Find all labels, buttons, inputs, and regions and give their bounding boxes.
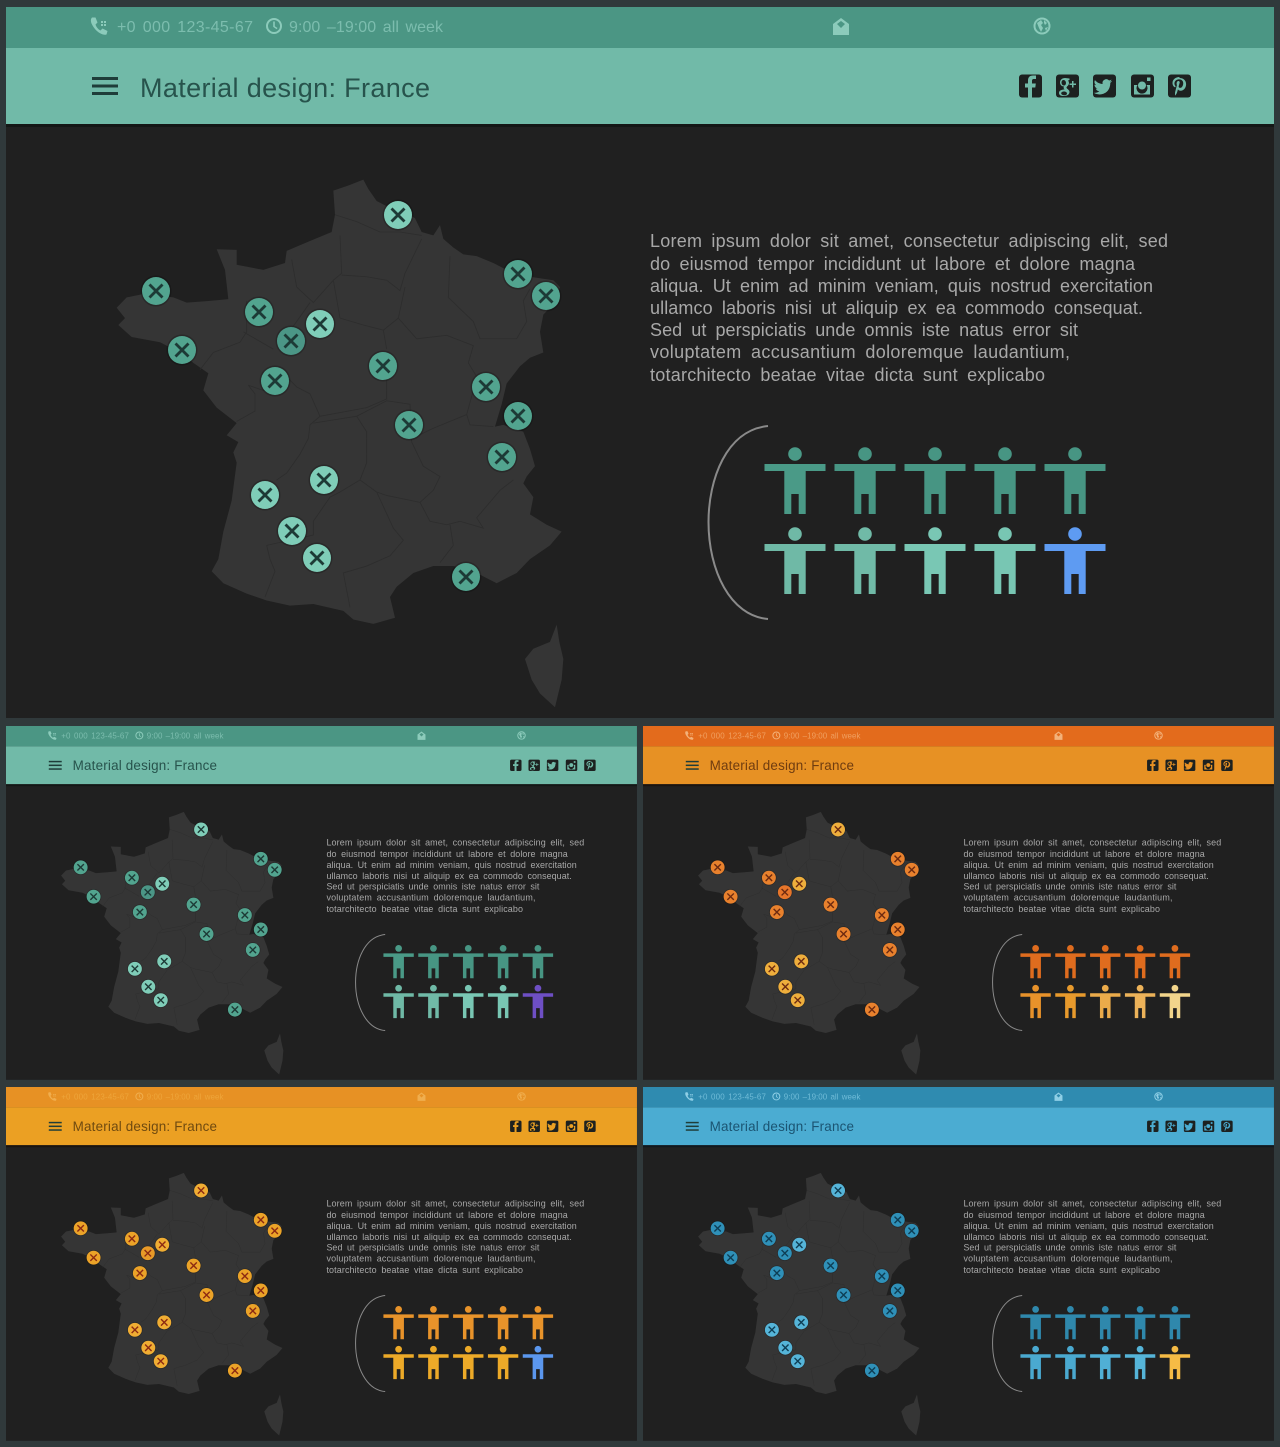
bracket arc bbox=[356, 1295, 385, 1392]
body text: Lorem ipsum dolor sit amet, consectetur adipiscing elit, sed bbox=[963, 1198, 1221, 1208]
map of France with pins bbox=[61, 1173, 283, 1435]
body text: ullamco laboris nisi ut aliquip ex ea commodo consequat. bbox=[326, 1232, 572, 1242]
header bar: Material design: France bbox=[73, 1119, 217, 1134]
header bar: Material design: France bbox=[73, 758, 217, 773]
body text: ullamco laboris nisi ut aliquip ex ea commodo consequat. bbox=[650, 298, 1143, 318]
body text: Lorem ipsum dolor sit amet, consectetur adipiscing elit, sed bbox=[326, 1198, 584, 1208]
top contact bar: +0 000 123-45-67 bbox=[698, 731, 766, 740]
body text: voluptatem accusantium doloremque laudantium, bbox=[650, 342, 1070, 362]
body text: ullamco laboris nisi ut aliquip ex ea commodo consequat. bbox=[963, 871, 1209, 881]
map of France with pins bbox=[61, 812, 283, 1074]
top contact bar bbox=[643, 726, 1274, 746]
header bar bbox=[6, 48, 1274, 127]
body text: aliqua. Ut enim ad minim veniam, quis nostrud exercitation bbox=[963, 860, 1214, 870]
map of France with pins bbox=[698, 1173, 920, 1435]
bracket arc bbox=[356, 934, 385, 1031]
panel: large teal slide bbox=[6, 7, 1274, 718]
pictogram chart: ten people bbox=[383, 945, 553, 1018]
header bar bbox=[643, 1107, 1274, 1147]
map of France with pins bbox=[698, 812, 920, 1074]
top contact bar: 9:00 –19:00 all week bbox=[147, 731, 223, 740]
body text: totarchitecto beatae vitae dicta sunt explicabo bbox=[326, 1265, 523, 1275]
pictogram chart: ten people bbox=[383, 1306, 553, 1379]
body text: voluptatem accusantium doloremque laudantium, bbox=[326, 893, 535, 903]
top contact bar: 9:00 –19:00 all week bbox=[289, 19, 444, 36]
body text: totarchitecto beatae vitae dicta sunt explicabo bbox=[963, 1265, 1160, 1275]
top contact bar: +0 000 123-45-67 bbox=[698, 1092, 766, 1101]
bracket arc bbox=[708, 426, 768, 619]
body text: do eiusmod tempor incididunt ut labore et dolore magna bbox=[963, 1210, 1205, 1220]
body text: voluptatem accusantium doloremque laudantium, bbox=[963, 1254, 1172, 1264]
slide background bbox=[6, 7, 1274, 718]
body text: Sed ut perspiciatis unde omnis iste natus error sit bbox=[963, 1243, 1177, 1253]
slide background bbox=[643, 1087, 1274, 1441]
top contact bar: 9:00 –19:00 all week bbox=[784, 1092, 860, 1101]
body text: aliqua. Ut enim ad minim veniam, quis nostrud exercitation bbox=[326, 860, 577, 870]
body text: do eiusmod tempor incididunt ut labore et dolore magna bbox=[326, 849, 568, 859]
panel: small amber slide bbox=[6, 1087, 637, 1441]
body text: totarchitecto beatae vitae dicta sunt explicabo bbox=[326, 904, 523, 914]
top contact bar bbox=[643, 1087, 1274, 1107]
header bar: Material design: France bbox=[710, 758, 854, 773]
body text: do eiusmod tempor incididunt ut labore et dolore magna bbox=[650, 254, 1136, 274]
body text: ullamco laboris nisi ut aliquip ex ea commodo consequat. bbox=[963, 1232, 1209, 1242]
body text: voluptatem accusantium doloremque laudantium, bbox=[326, 1254, 535, 1264]
top contact bar: +0 000 123-45-67 bbox=[61, 1092, 129, 1101]
top contact bar bbox=[6, 726, 637, 746]
body text bbox=[963, 837, 1221, 914]
body text bbox=[326, 1198, 584, 1275]
body text: Sed ut perspiciatis unde omnis iste natus error sit bbox=[326, 882, 540, 892]
body text bbox=[326, 837, 584, 914]
map of France with pins bbox=[117, 180, 563, 707]
body text: aliqua. Ut enim ad minim veniam, quis nostrud exercitation bbox=[650, 276, 1153, 296]
top contact bar: +0 000 123-45-67 bbox=[61, 731, 129, 740]
slide background bbox=[6, 726, 637, 1080]
body text bbox=[650, 231, 1168, 385]
bracket arc bbox=[993, 1295, 1022, 1392]
body text: Lorem ipsum dolor sit amet, consectetur adipiscing elit, sed bbox=[650, 231, 1168, 251]
body text bbox=[963, 1198, 1221, 1275]
body text: totarchitecto beatae vitae dicta sunt explicabo bbox=[963, 904, 1160, 914]
pictogram chart: ten people bbox=[1020, 945, 1190, 1018]
body text: ullamco laboris nisi ut aliquip ex ea commodo consequat. bbox=[326, 871, 572, 881]
body text: Lorem ipsum dolor sit amet, consectetur adipiscing elit, sed bbox=[326, 837, 584, 847]
pictogram chart: ten people bbox=[764, 447, 1106, 594]
top contact bar: 9:00 –19:00 all week bbox=[784, 731, 860, 740]
body text: Sed ut perspiciatis unde omnis iste natus error sit bbox=[650, 320, 1078, 340]
bracket arc bbox=[993, 934, 1022, 1031]
panel: small orange slide bbox=[643, 726, 1274, 1080]
header bar: Material design: France bbox=[710, 1119, 854, 1134]
body text: voluptatem accusantium doloremque laudantium, bbox=[963, 893, 1172, 903]
top contact bar: 9:00 –19:00 all week bbox=[147, 1092, 223, 1101]
header bar bbox=[6, 746, 637, 786]
panel: small teal slide bbox=[6, 726, 637, 1080]
body text: aliqua. Ut enim ad minim veniam, quis nostrud exercitation bbox=[963, 1221, 1214, 1231]
header bar bbox=[6, 1107, 637, 1147]
slide background bbox=[6, 1087, 637, 1441]
body text: totarchitecto beatae vitae dicta sunt explicabo bbox=[650, 365, 1045, 385]
body text: Sed ut perspiciatis unde omnis iste natus error sit bbox=[963, 882, 1177, 892]
header bar: Material design: France bbox=[140, 73, 430, 103]
body text: aliqua. Ut enim ad minim veniam, quis nostrud exercitation bbox=[326, 1221, 577, 1231]
pictogram chart: ten people bbox=[1020, 1306, 1190, 1379]
body text: Lorem ipsum dolor sit amet, consectetur adipiscing elit, sed bbox=[963, 837, 1221, 847]
top contact bar bbox=[6, 1087, 637, 1107]
top contact bar: +0 000 123-45-67 bbox=[117, 19, 253, 36]
body text: Sed ut perspiciatis unde omnis iste natus error sit bbox=[326, 1243, 540, 1253]
header bar bbox=[643, 746, 1274, 786]
slide background bbox=[643, 726, 1274, 1080]
top contact bar bbox=[6, 7, 1274, 48]
body text: do eiusmod tempor incididunt ut labore et dolore magna bbox=[326, 1210, 568, 1220]
body text: do eiusmod tempor incididunt ut labore et dolore magna bbox=[963, 849, 1205, 859]
panel: small blue slide bbox=[643, 1087, 1274, 1441]
